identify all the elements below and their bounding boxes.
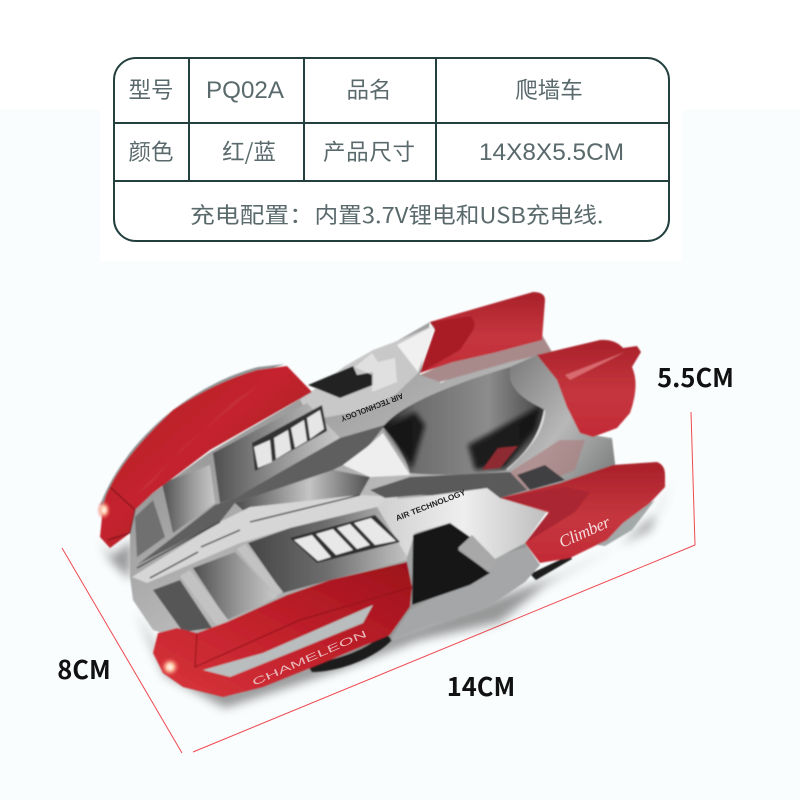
upper vent bbox=[252, 405, 327, 471]
bottom right red fin bbox=[500, 462, 665, 563]
silver triangle bbox=[343, 433, 410, 477]
dimension lines bbox=[62, 412, 695, 753]
upper window panel bbox=[162, 465, 215, 533]
upper well panel bbox=[135, 500, 165, 557]
middle right red fin bbox=[537, 340, 641, 437]
body shell bbox=[130, 322, 617, 660]
rear dark block bbox=[412, 523, 490, 605]
top right red fin bbox=[420, 292, 545, 373]
lower rear sill bbox=[390, 547, 540, 640]
cell: model value: PQ02A bbox=[206, 77, 284, 104]
cell: charging configuration bbox=[190, 198, 604, 230]
canopy dark streaks bbox=[385, 405, 542, 470]
rear block trim bbox=[458, 535, 498, 572]
band lines bbox=[137, 495, 360, 578]
cell: size value: 14X8X5.5CM bbox=[479, 139, 624, 166]
label: height: 5.5CM bbox=[657, 358, 734, 395]
front lower red bumper bbox=[153, 562, 412, 697]
black air intake bbox=[308, 366, 373, 398]
translucent band under top fin bbox=[420, 335, 552, 382]
lower side panel bbox=[248, 507, 407, 593]
upper side panel bbox=[213, 403, 340, 503]
label: width: 8CM bbox=[57, 650, 111, 687]
cell: model label: 型号 bbox=[128, 73, 174, 105]
bumper crease bbox=[195, 587, 412, 667]
cell: name value: 爬墙车 bbox=[515, 73, 583, 105]
left fin crease bbox=[108, 487, 135, 540]
dark wedge bbox=[137, 425, 385, 565]
canopy highlight top bbox=[440, 360, 511, 382]
grey band under canopy bbox=[370, 472, 527, 498]
rear dark steps bbox=[517, 465, 565, 490]
middle fin ridge bbox=[565, 352, 625, 380]
bottom fin grey skirt bbox=[590, 500, 655, 546]
lamp: left front bbox=[97, 500, 111, 520]
cockpit canopy bbox=[383, 367, 545, 475]
top roof silver bbox=[300, 325, 435, 420]
canopy highlight right bbox=[507, 410, 545, 470]
roof light triangle bbox=[397, 325, 435, 372]
cell: charging configuration: 内置3.7V锂电和USB充电线. bbox=[314, 198, 604, 230]
left top red fin bbox=[100, 366, 312, 548]
cell: size label: 产品尺寸 bbox=[323, 135, 415, 167]
decal: climber: Climber bbox=[556, 512, 613, 552]
lower well panels bbox=[153, 544, 283, 632]
cell: charging configuration: 充电配置： bbox=[190, 198, 314, 230]
cell: color label: 颜色 bbox=[128, 135, 174, 167]
centre grey swoosh bbox=[235, 470, 370, 517]
bottom fin inner shade bbox=[500, 487, 590, 543]
canopy red reflection bbox=[482, 446, 518, 470]
top fin inner shade bbox=[420, 316, 475, 373]
wall climbing car bbox=[97, 292, 672, 708]
decal: air technology upper: AIR TECHNOLOGY bbox=[339, 391, 405, 423]
decal: air technology lower: AIR TECHNOLOGY bbox=[394, 488, 467, 523]
silver air-technology panel bbox=[377, 488, 550, 560]
wheels bbox=[307, 555, 572, 672]
spec table bbox=[114, 58, 669, 241]
left fin shadow edge bbox=[100, 364, 285, 505]
rear tint bbox=[510, 440, 585, 490]
car shadow bbox=[100, 478, 672, 708]
cell: name label: 品名 bbox=[346, 73, 392, 105]
roof notch bbox=[355, 353, 397, 392]
rear grey block bbox=[507, 355, 617, 500]
lamp: bottom front bbox=[160, 657, 180, 677]
upper side stripe bbox=[240, 445, 330, 498]
cell: color value: 红/蓝 bbox=[222, 135, 276, 167]
label: length: 14CM bbox=[447, 667, 515, 704]
decal: chameleon: CHAMELEON bbox=[251, 629, 369, 689]
lower vent bbox=[290, 515, 400, 563]
silver centre band bbox=[132, 495, 400, 583]
bumper silver inset bbox=[203, 605, 373, 677]
left fin highlight bbox=[135, 385, 260, 495]
